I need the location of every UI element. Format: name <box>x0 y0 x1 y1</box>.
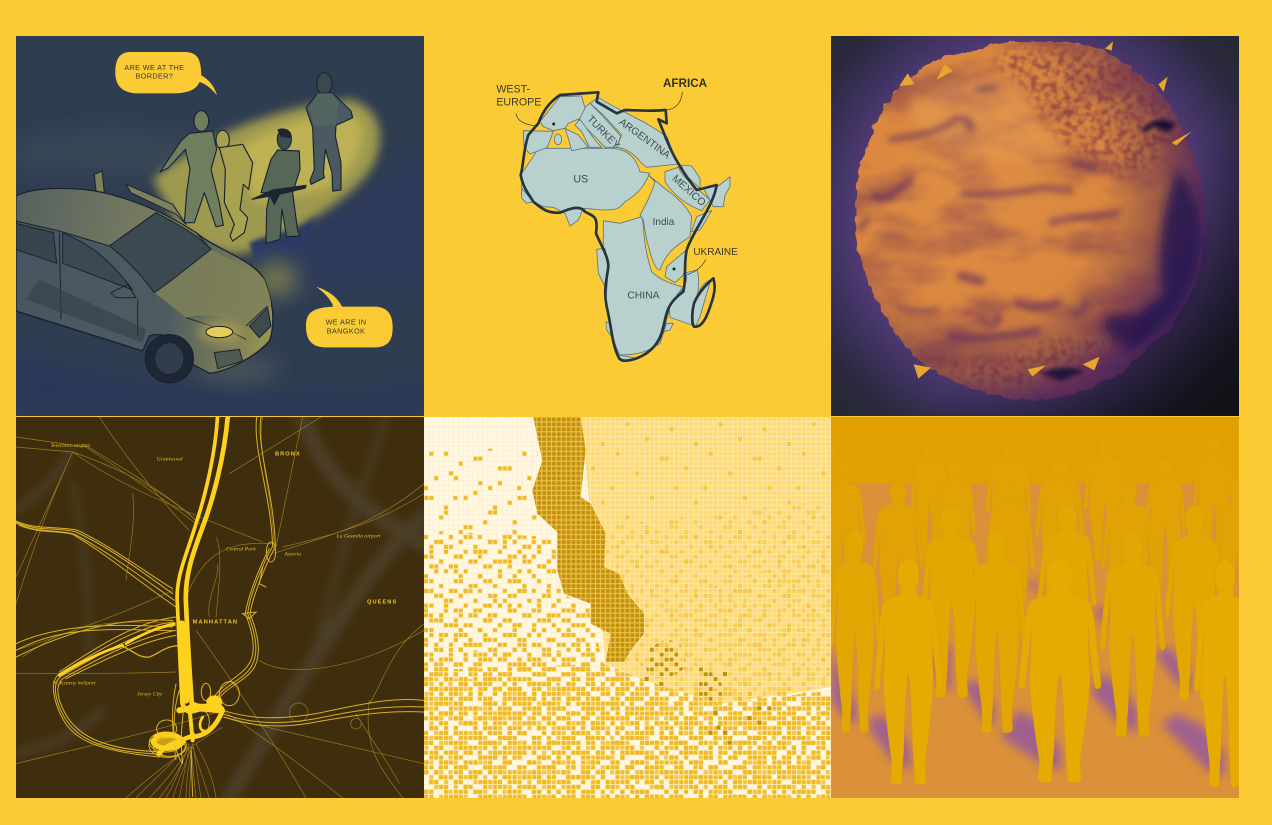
dark swirl streaks <box>859 88 1118 339</box>
country labels <box>573 114 707 302</box>
middle row figures <box>829 505 1224 737</box>
panel: flight paths over New York map: Central Park <box>226 546 256 552</box>
planet spikes <box>899 41 1192 379</box>
country labels: ARGENTINA <box>617 117 672 161</box>
light upper-right region <box>581 417 831 704</box>
label: West Europe with leader: EUROPE <box>496 97 541 109</box>
panel: map comparing Africa with countries <box>496 77 738 362</box>
label: Ukraine with leader <box>672 247 738 275</box>
shaded right limb <box>1125 169 1201 353</box>
figure: armed man with rifle <box>252 129 306 243</box>
country labels: MEXICO <box>670 173 707 209</box>
main Hudson corridor <box>59 414 228 754</box>
speech bubble: are we at the border: BORDER? <box>135 72 173 81</box>
label: Ukraine with leader: UKRAINE <box>693 247 738 258</box>
speech bubble: are we at the border: ARE WE AT THE <box>124 63 184 72</box>
label: West Europe with leader: WEST- <box>496 83 531 95</box>
panel: rows of yellow human body models <box>831 417 1239 798</box>
place labels: QUEENS <box>367 599 397 605</box>
scattered cells in sparse left region <box>424 449 831 798</box>
label: Africa with leader <box>663 77 708 110</box>
panel: flight paths over New York map: Astoria <box>283 551 301 557</box>
panel: flight paths over New York map <box>16 417 424 798</box>
tangled routes at harbour <box>149 682 239 797</box>
label: West Europe with leader <box>496 83 555 126</box>
speech bubble: we are in Bangkok: WE ARE IN <box>326 317 366 326</box>
back row figures <box>813 434 1260 633</box>
place labels: BRONX <box>275 452 301 458</box>
figure: police officer with hands on hips <box>306 73 353 191</box>
country labels: India <box>653 217 675 228</box>
figure: bald man being held <box>216 130 253 241</box>
panel: flight paths over New York map: La Guardia airport <box>336 533 381 539</box>
speech bubble: we are in Bangkok: BANGKOK <box>327 326 365 335</box>
country labels: CHINA <box>627 291 660 302</box>
speech bubble: we are in Bangkok <box>306 287 393 347</box>
place labels <box>193 452 397 626</box>
secondary route bundles <box>16 417 424 757</box>
planet body <box>855 40 1205 400</box>
country labels: TURKEY <box>585 114 622 152</box>
place labels: MANHATTAN <box>193 620 238 626</box>
front row figures <box>874 559 1256 787</box>
tail of dark band <box>644 639 771 745</box>
panel: comic illustration of car and four men at night <box>16 36 424 416</box>
panel: pixel grid dot distribution <box>424 417 831 798</box>
headlight glow on ground <box>153 99 380 254</box>
countries filling Africa <box>522 96 730 362</box>
faint grey background routes <box>16 417 424 798</box>
panel: flight paths over New York map: W. Kearny heliport <box>53 681 96 687</box>
Africa outline <box>521 92 717 361</box>
figure: man pointing <box>160 111 223 227</box>
scattered cells in light region <box>581 417 831 704</box>
panel: flight paths over New York map: Grantwood <box>157 457 183 463</box>
country labels: US <box>573 173 588 185</box>
purple floor shadows <box>831 580 1224 777</box>
panel: orange and purple planet render <box>831 36 1239 416</box>
label: Africa with leader: AFRICA <box>663 77 708 90</box>
panel: flight paths over New York map: Jersey City <box>137 691 163 697</box>
car <box>16 171 273 383</box>
panel: flight paths over New York map: Teterboro airport <box>51 443 90 449</box>
dark diagonal band <box>532 417 644 662</box>
speech bubble: are we at the border <box>115 52 217 95</box>
thin flight routes <box>16 417 424 798</box>
